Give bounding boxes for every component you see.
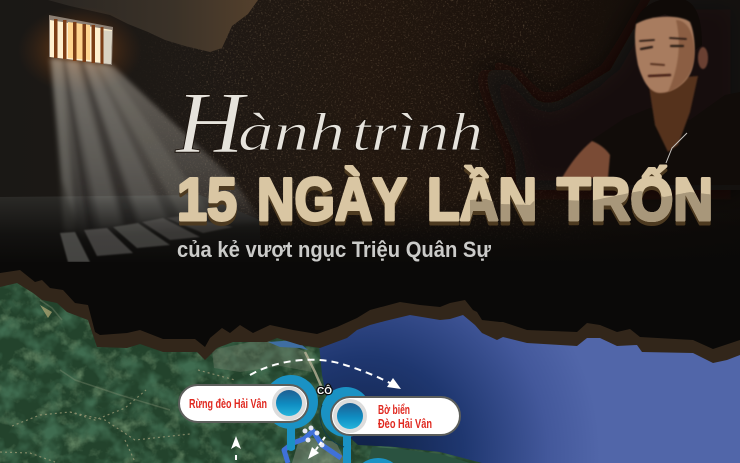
dashed arrow down the route [308,437,325,459]
title face: LẦN [427,166,537,233]
figure shadow [480,0,740,190]
main title: 15 NGÀY LẦN TRỐN [179,164,711,226]
callout: Rừng đèo Hải Vân: Rừng đèo Hải Vân [189,396,267,411]
prison floor [0,195,260,265]
title extrusion [177,170,713,237]
callout: Bờ biển Đèo Hải Vân: Đèo Hải Vân [378,416,432,431]
land [0,270,490,463]
cracked lower part of title: LẦN [427,166,537,233]
eyes, nose and mouth [640,38,686,76]
cracked lower part of title [470,191,711,222]
script heading: Hành trình [175,75,483,172]
pin: Bờ biển Đèo Hải Vân disc [320,387,371,463]
title face: NGÀY [257,166,407,233]
ear [698,47,708,69]
callout: Rừng đèo Hải Vân [179,385,308,422]
portrait of Triệu Quân Sự [480,0,740,190]
dashed arc arrow over the bay [250,360,401,389]
torn plaster flap [48,0,258,52]
script heading: Hành trình: trình [352,102,483,162]
pin: Rừng đèo Hải Vân disc [264,375,318,451]
map panel [0,270,740,463]
torn paper edge and black title band [0,262,740,363]
ocean [0,300,740,463]
title face [177,166,713,233]
place label: CÔ: CÔ [317,384,332,397]
hair [634,0,702,50]
bottom fade to black [0,197,740,265]
title extrusion: TRỐN [557,170,713,237]
prison window with light beams [18,6,262,236]
face [635,17,695,93]
script heading: Hành trình: ành [238,102,345,162]
background: prison wall [0,0,660,240]
floor light stripes [60,216,233,262]
cracked lower part of title: TRỐN [557,166,713,233]
bay and beach [268,340,308,350]
window frame and bars [49,15,113,65]
title face: TRỐN [557,166,713,233]
title face: 15 [177,166,237,233]
town by the bay [212,340,312,372]
route lines [284,431,341,463]
script heading: Hành trình: H [175,75,249,172]
callout: Bờ biển Đèo Hải Vân [331,397,460,435]
shirt zip [666,133,687,163]
pin: third location, partly cropped [363,458,393,463]
title extrusion: NGÀY [257,170,407,237]
light beams [50,58,262,236]
route stop dots [302,426,324,448]
subtitle: của kẻ vượt ngục Triệu Quân Sự [177,237,492,262]
callout: Bờ biển Đèo Hải Vân: Bờ biển [378,402,410,417]
window glow [18,6,142,94]
title extrusion: LẦN [427,170,537,237]
mountain roads [0,370,235,462]
up arrow on the mountain [231,436,241,463]
arm [562,141,610,178]
neck [648,76,698,152]
title extrusion: 15 [177,170,237,237]
shoulders and shirt [585,92,740,185]
